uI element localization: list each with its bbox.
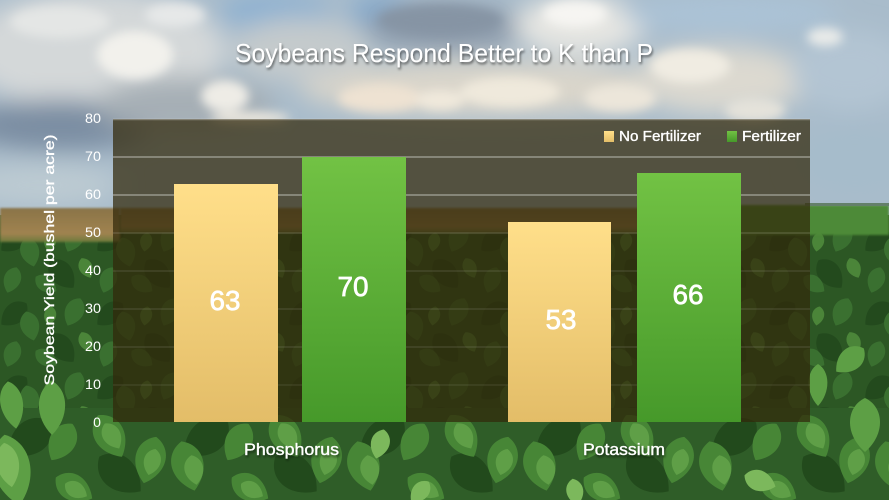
y-axis tick labels: 30 [85,300,101,316]
bar: phosphorus no fertilizer 63: 63 [210,285,240,316]
y-axis tick labels [85,110,101,430]
title: Soybeans Respond Better to K than P [235,38,653,68]
soybean foliage [0,232,889,500]
y-axis title: Soybean Yield (bushel per acre) [41,134,57,386]
chart plot background [113,119,810,422]
y-axis tick labels: 50 [85,224,101,240]
y-axis tick labels: 20 [85,338,101,354]
bar: potassium no fertilizer 53: 53 [546,304,576,335]
bar: potassium no fertilizer 53 [508,222,611,422]
category label: phosphorus: Phosphorus [244,441,339,459]
bar: phosphorus fertilizer 70: 70 [338,271,368,302]
bar: phosphorus fertilizer 70 [302,157,406,422]
legend: fertilizer: Fertilizer [742,129,801,145]
bar: potassium fertilizer 66: 66 [672,279,704,310]
legend: no fertilizer: No Fertilizer [619,129,701,145]
legend [604,129,801,145]
category label: potassium: Potassium [583,441,665,459]
y-axis tick labels: 80 [85,110,101,126]
sky with clouds [0,0,889,215]
bar: phosphorus no fertilizer 63 [174,184,278,422]
y-axis tick labels: 70 [85,148,101,164]
chart: soybean yield by nutrient [41,110,810,459]
y-axis tick labels: 0 [93,414,101,430]
y-axis tick labels: 60 [85,186,101,202]
y-axis tick labels: 40 [85,262,101,278]
horizon field [0,203,889,242]
bar: potassium fertilizer 66 [637,173,741,422]
y-axis tick labels: 10 [85,376,101,392]
